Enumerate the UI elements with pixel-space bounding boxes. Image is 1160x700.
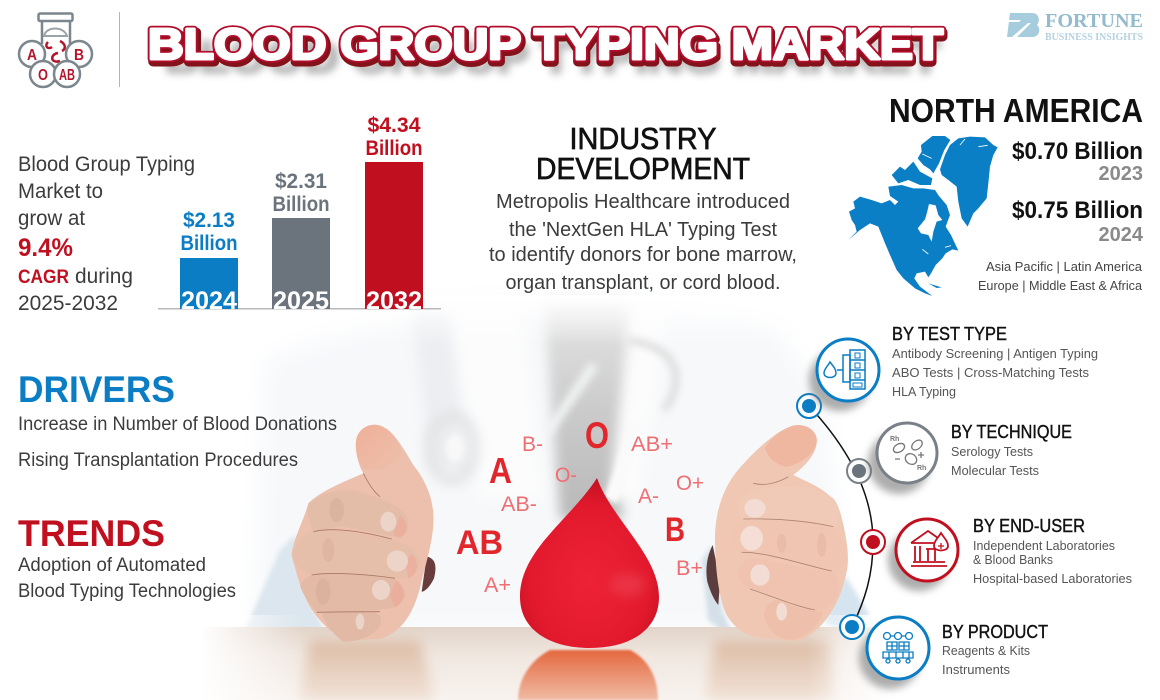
text: CAGR statement: CAGR [18, 267, 69, 288]
blood group labels: B [665, 511, 685, 549]
blood group labels: A- [638, 485, 659, 508]
panel: by test type: Antibody Screening | Antigen Typing [892, 346, 1098, 361]
blood group labels: B+ [676, 557, 703, 580]
icon: Rh cells: Rh [917, 465, 926, 472]
bar chart: $4.34 [368, 114, 421, 137]
text: CAGR statement: Blood Group Typing [18, 153, 195, 176]
title: BLOOD GROUP TYPING MARKET [150, 23, 943, 72]
panel: north america: Asia Pacific | Latin America [986, 259, 1143, 274]
text: drivers: DRIVERS [18, 369, 175, 410]
table with reflections [200, 615, 890, 700]
title: BLOOD GROUP TYPING MARKET [148, 20, 943, 69]
logo: Fortune Business Insights: FORTUNE [1045, 10, 1143, 32]
blood group labels: AB+ [631, 433, 673, 456]
map: north america [848, 136, 998, 296]
panel: north america: Europe | Middle East & Africa [978, 278, 1143, 293]
panel: by end-user [888, 516, 1132, 591]
icon: hospital [911, 531, 948, 566]
panel: by technique: Serology Tests [951, 444, 1033, 459]
panel: by test type: BY TEST TYPE [892, 324, 1007, 344]
icon: blood group tube logo: AB [59, 67, 75, 84]
right hand [706, 425, 848, 641]
blood group labels: AB- [501, 493, 537, 516]
text: CAGR statement: grow at [18, 207, 85, 230]
text: trends: Adoption of Automated [18, 555, 206, 576]
icon: test cards [824, 350, 865, 389]
bar chart [158, 114, 441, 315]
panel: north america [889, 92, 1144, 293]
icon: reagent kits [883, 632, 913, 663]
icon: blood group tube logo: B [74, 47, 84, 64]
text: trends: Blood Typing Technologies [18, 581, 236, 602]
text: trends: TRENDS [18, 513, 165, 554]
text: drivers: Rising Transplantation Procedures [18, 450, 298, 471]
title: BLOOD GROUP TYPING MARKET [148, 20, 943, 69]
bar chart: Billion [180, 232, 238, 255]
text: CAGR statement [18, 153, 195, 315]
logo: Fortune Business Insights: BUSINESS INSIGHTS [1045, 32, 1143, 43]
icon: blood group tube logo: A [27, 47, 37, 64]
panel: north america: $0.70 Billion [1012, 138, 1143, 165]
panel: by end-user: Independent Laboratories [973, 538, 1115, 553]
blood group labels: O- [555, 464, 577, 487]
text: CAGR statement: Market to [18, 180, 103, 203]
panel: industry development: INDUSTRY [570, 121, 716, 156]
panel: by product [859, 617, 1048, 689]
icon: red blood drop [520, 478, 659, 648]
panel: north america: 2023 [1098, 163, 1143, 185]
panel: by technique: Molecular Tests [951, 463, 1039, 478]
panel: by end-user: Hospital-based Laboratories [973, 571, 1132, 586]
blood group labels: O [585, 415, 609, 456]
panel: industry development: the 'NextGen HLA' Typing Test [509, 219, 777, 241]
icon: blood group tube logo [19, 14, 92, 87]
panel: by test type [809, 324, 1098, 411]
text: drivers [18, 369, 337, 471]
panel: industry development: to identify donors for bone marrow, [489, 244, 797, 266]
text: trends [18, 513, 236, 602]
icon: Rh cells: Rh [890, 436, 899, 443]
blood group labels: AB [456, 524, 503, 562]
bar chart: 2024 [181, 287, 237, 315]
panel: by product: BY PRODUCT [942, 622, 1048, 642]
panel: industry development: Metropolis Healthcare introduced [496, 191, 790, 213]
panel: by technique [868, 422, 1072, 494]
panel: by test type: ABO Tests | Cross-Matching Tests [892, 365, 1089, 380]
text: CAGR statement: during [75, 265, 133, 288]
title: BLOOD GROUP TYPING MARKET [165, 33, 940, 82]
left hand [292, 425, 435, 642]
blood group labels [456, 415, 704, 597]
bar chart: $2.13 [183, 209, 235, 232]
panel: by end-user: BY END-USER [973, 516, 1085, 536]
bar chart: 2025 [273, 287, 329, 315]
icon: Rh cells [890, 436, 926, 472]
panel: north america: 2024 [1098, 224, 1144, 246]
panel: industry development: organ transplant, or cord blood. [506, 272, 780, 294]
panel: by product: Instruments [942, 662, 1010, 677]
blood group labels: B- [522, 433, 543, 456]
blood group labels: A+ [484, 574, 511, 597]
text: CAGR statement: 2025-2032 [18, 292, 118, 315]
panel: by technique: BY TECHNIQUE [951, 422, 1072, 442]
text: CAGR statement: 9.4% [18, 234, 73, 262]
logo: Fortune Business Insights [1006, 10, 1143, 43]
panel: north america: $0.75 Billion [1012, 197, 1143, 224]
icon: blood group tube logo: O [38, 67, 48, 84]
bar chart: Billion [366, 137, 422, 160]
panel: north america: NORTH AMERICA [889, 92, 1143, 129]
panel: by end-user: & Blood Banks [973, 552, 1053, 567]
panel: industry development: DEVELOPMENT [536, 151, 750, 186]
text: drivers: Increase in Number of Blood Donations [18, 414, 337, 435]
panel: industry development [489, 121, 797, 294]
bar chart: Billion [272, 193, 330, 216]
blood group labels: A [489, 450, 512, 491]
bar chart: 2032 [366, 287, 422, 315]
timeline arc with nodes [797, 394, 885, 639]
bar chart: $2.31 [275, 170, 327, 193]
blood group labels: O+ [676, 472, 704, 495]
panel: by test type: HLA Typing [892, 384, 956, 399]
panel: by product: Reagents & Kits [942, 643, 1030, 658]
